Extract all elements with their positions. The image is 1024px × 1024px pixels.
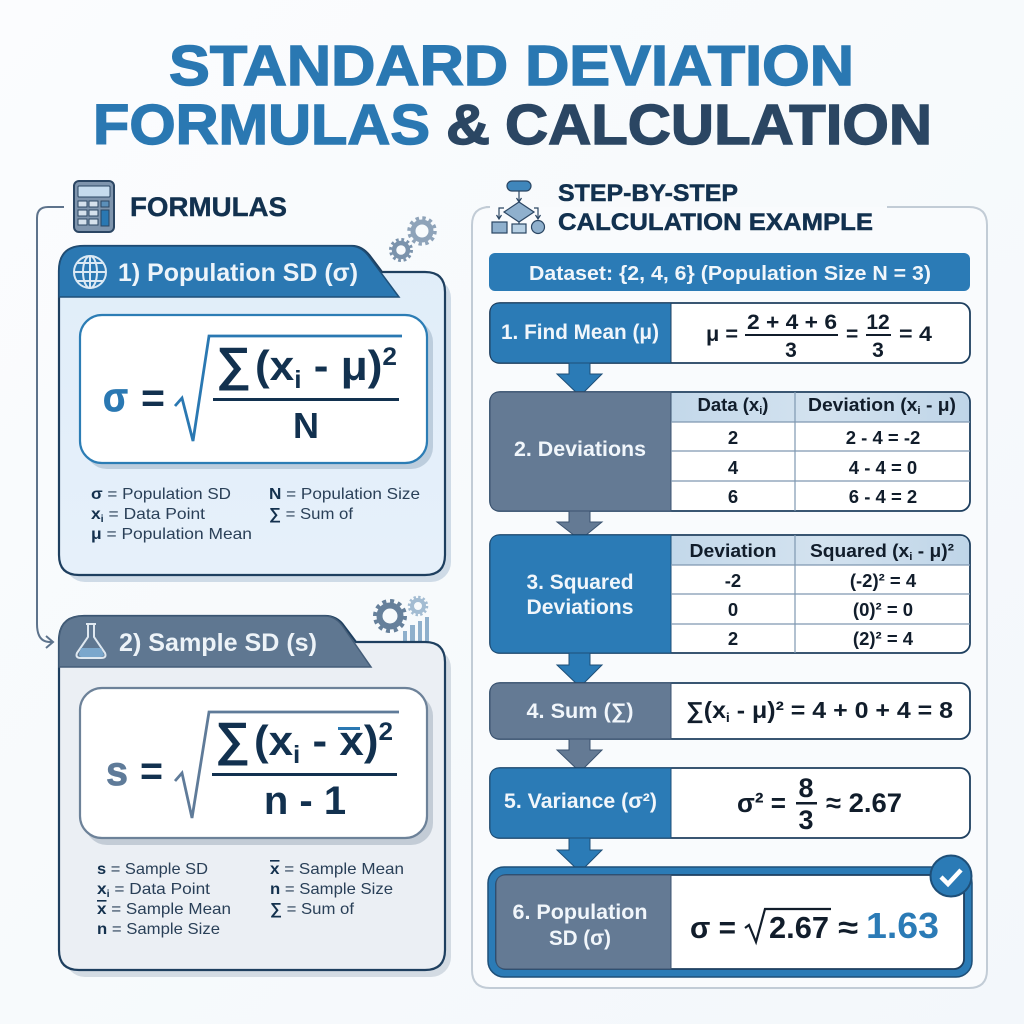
step 6: population SD result: 1.63: [866, 905, 939, 946]
step 5: variance: [490, 768, 970, 838]
legend: population: ∑ = Sum of: [269, 506, 354, 523]
legend: sample: n = Sample Size: [270, 881, 393, 898]
icon: flowchart: [492, 181, 544, 234]
step 1: find mean: 3: [785, 339, 797, 362]
formula box: sample: [80, 688, 433, 845]
formula box: population: N: [293, 405, 319, 446]
formula box: population: - μ): [302, 342, 382, 389]
step 4: sum: - μ)² = 4 + 0 + 4 = 8: [730, 697, 953, 723]
icon: gears and bars: [375, 597, 429, 642]
legend: sample: i: [107, 889, 110, 900]
step 5: variance: σ² =: [737, 788, 786, 818]
step 3: squared deviations: i: [909, 551, 912, 563]
step 3: squared deviations: - μ)²: [912, 540, 954, 561]
formula box: sample: i: [293, 741, 300, 769]
tab: population SD: [59, 246, 399, 297]
formula box: sample: =: [140, 748, 163, 794]
step 2: deviations: 2. Deviations: [514, 438, 646, 461]
icon: check badge: [930, 856, 972, 896]
step 2: deviations: 2 - 4 = -2: [846, 427, 920, 448]
dataset banner: [489, 253, 970, 291]
step 3: squared deviations: 3. Squared: [526, 571, 634, 594]
step 3: squared deviations: 0: [728, 599, 738, 620]
step 3: squared deviations: Squared (x: [810, 540, 906, 561]
step 1: find mean: 1. Find Mean (μ): [501, 321, 659, 344]
formula box: sample: s: [106, 748, 128, 794]
legend: population: σ = Population SD: [91, 486, 231, 503]
formula box: sample: ∑: [215, 712, 250, 766]
formula box: sample: n - 1: [264, 779, 346, 823]
formula box: sample: (x: [254, 717, 291, 764]
formula box: population: σ: [103, 374, 128, 420]
step 1: find mean: 2 + 4 + 6: [747, 311, 837, 334]
step 6: population SD result: 6. Population: [512, 901, 648, 924]
heading: step-by-step: STEP-BY-STEP: [558, 180, 738, 207]
step 2: deviations: i: [759, 405, 762, 417]
formula box: population: =: [141, 375, 165, 421]
step 1: find mean: 12: [866, 311, 890, 334]
panel: step-by-step: [472, 207, 987, 988]
legend: sample: s = Sample SD: [97, 861, 208, 878]
legend: population: = Data Point: [104, 506, 206, 523]
legend: population: μ = Population Mean: [91, 526, 252, 543]
panel: sample SD: [59, 616, 451, 977]
step 4: sum: i: [726, 710, 730, 725]
tab: population SD: 1) Population SD (σ): [118, 259, 358, 287]
arrow: step 5 to 6: [557, 838, 602, 872]
icon: calculator: [74, 181, 114, 232]
title: STANDARD DEVIATION: [169, 34, 854, 98]
tab: sample SD: [59, 616, 371, 667]
step 2: deviations: i: [917, 405, 921, 417]
step 3: squared deviations: Deviation: [690, 540, 776, 561]
title: [93, 34, 932, 157]
legend: sample: [97, 861, 404, 938]
legend: sample: = Data Point: [110, 881, 211, 898]
step 6: population SD result: ≈: [838, 910, 858, 945]
step 2: deviations: - μ): [921, 394, 956, 415]
step 6: population SD result: [488, 867, 972, 977]
step 6: population SD result: σ =: [690, 910, 736, 945]
step 4: sum: [490, 683, 970, 739]
formula box: population: [80, 315, 433, 469]
step 1: find mean: [490, 303, 970, 363]
step 2: deviations: ): [762, 394, 768, 415]
legend: population: x: [91, 506, 101, 523]
tab: sample SD: 2) Sample SD (s): [119, 629, 317, 657]
step 2: deviations: Deviation (x: [808, 394, 913, 415]
step 2: deviations: 4: [728, 457, 739, 478]
heading: formulas: FORMULAS: [130, 192, 287, 222]
step 3: squared deviations: 2: [728, 628, 738, 649]
step 4: sum: 4. Sum (∑): [526, 700, 634, 723]
step 2: deviations: 2: [728, 427, 738, 448]
step 1: find mean: =: [846, 323, 858, 346]
step 3: squared deviations: -2: [725, 570, 741, 591]
title: CALCULATION: [505, 93, 932, 157]
arrow: step 4 to 5: [557, 739, 602, 772]
step 5: variance: 3: [798, 805, 814, 835]
arrow: step 2 to 3: [557, 511, 602, 540]
step 2: deviations: 6 - 4 = 2: [849, 486, 917, 507]
legend: sample: ∑ = Sum of: [270, 901, 355, 918]
step 3: squared deviations: (0)² = 0: [853, 599, 913, 620]
step 2: deviations: 6: [728, 486, 738, 507]
step 6: population SD result: SD (σ): [549, 927, 611, 950]
legend: sample: x = Sample Mean: [270, 861, 404, 878]
legend: sample: x = Sample Mean: [97, 901, 231, 918]
dataset banner: Dataset: {2, 4, 6} (Population Size N = 3): [529, 263, 931, 285]
step 5: variance: 5. Variance (σ²): [504, 790, 657, 813]
heading: step-by-step: [558, 180, 873, 236]
panel: population SD: [59, 246, 451, 582]
icon: gears top: [390, 218, 435, 260]
step 2: deviations: 4 - 4 = 0: [849, 457, 917, 478]
step 1: find mean: μ =: [706, 323, 738, 346]
arrow: step 3 to 4: [557, 653, 602, 687]
title: FORMULAS: [93, 93, 430, 157]
formula box: population: ∑: [216, 337, 251, 391]
step 6: population SD result: 2.67: [769, 910, 829, 945]
step 4: sum: ∑(x: [686, 697, 723, 723]
formula box: population: (x: [255, 342, 292, 389]
formula box: population: i: [294, 366, 302, 394]
legend: population: N = Population Size: [269, 486, 420, 503]
formula box: population: 2: [382, 343, 397, 371]
legend: sample: n = Sample Size: [97, 921, 220, 938]
step 5: variance: ≈ 2.67: [826, 788, 902, 818]
step 2: deviations: Data (x: [698, 394, 759, 415]
legend: population: [91, 486, 420, 543]
step 1: find mean: 3: [872, 339, 884, 362]
step 3: squared deviations: [490, 535, 970, 653]
legend: population: i: [101, 514, 104, 525]
step 1: find mean: = 4: [899, 323, 932, 346]
step 2: deviations: [490, 392, 970, 511]
arrow: step 1 to 2: [557, 363, 602, 396]
step 3: squared deviations: (-2)² = 4: [850, 570, 917, 591]
connector arrow between formulas: [37, 207, 64, 648]
title: &: [446, 93, 490, 157]
step 3: squared deviations: (2)² = 4: [853, 628, 914, 649]
formula box: sample: 2: [378, 718, 393, 746]
formula box: sample: - x): [300, 717, 378, 764]
step 5: variance: 8: [798, 773, 814, 803]
heading: step-by-step: CALCULATION EXAMPLE: [558, 209, 873, 236]
step 3: squared deviations: Deviations: [526, 596, 634, 619]
legend: sample: x: [97, 881, 107, 898]
